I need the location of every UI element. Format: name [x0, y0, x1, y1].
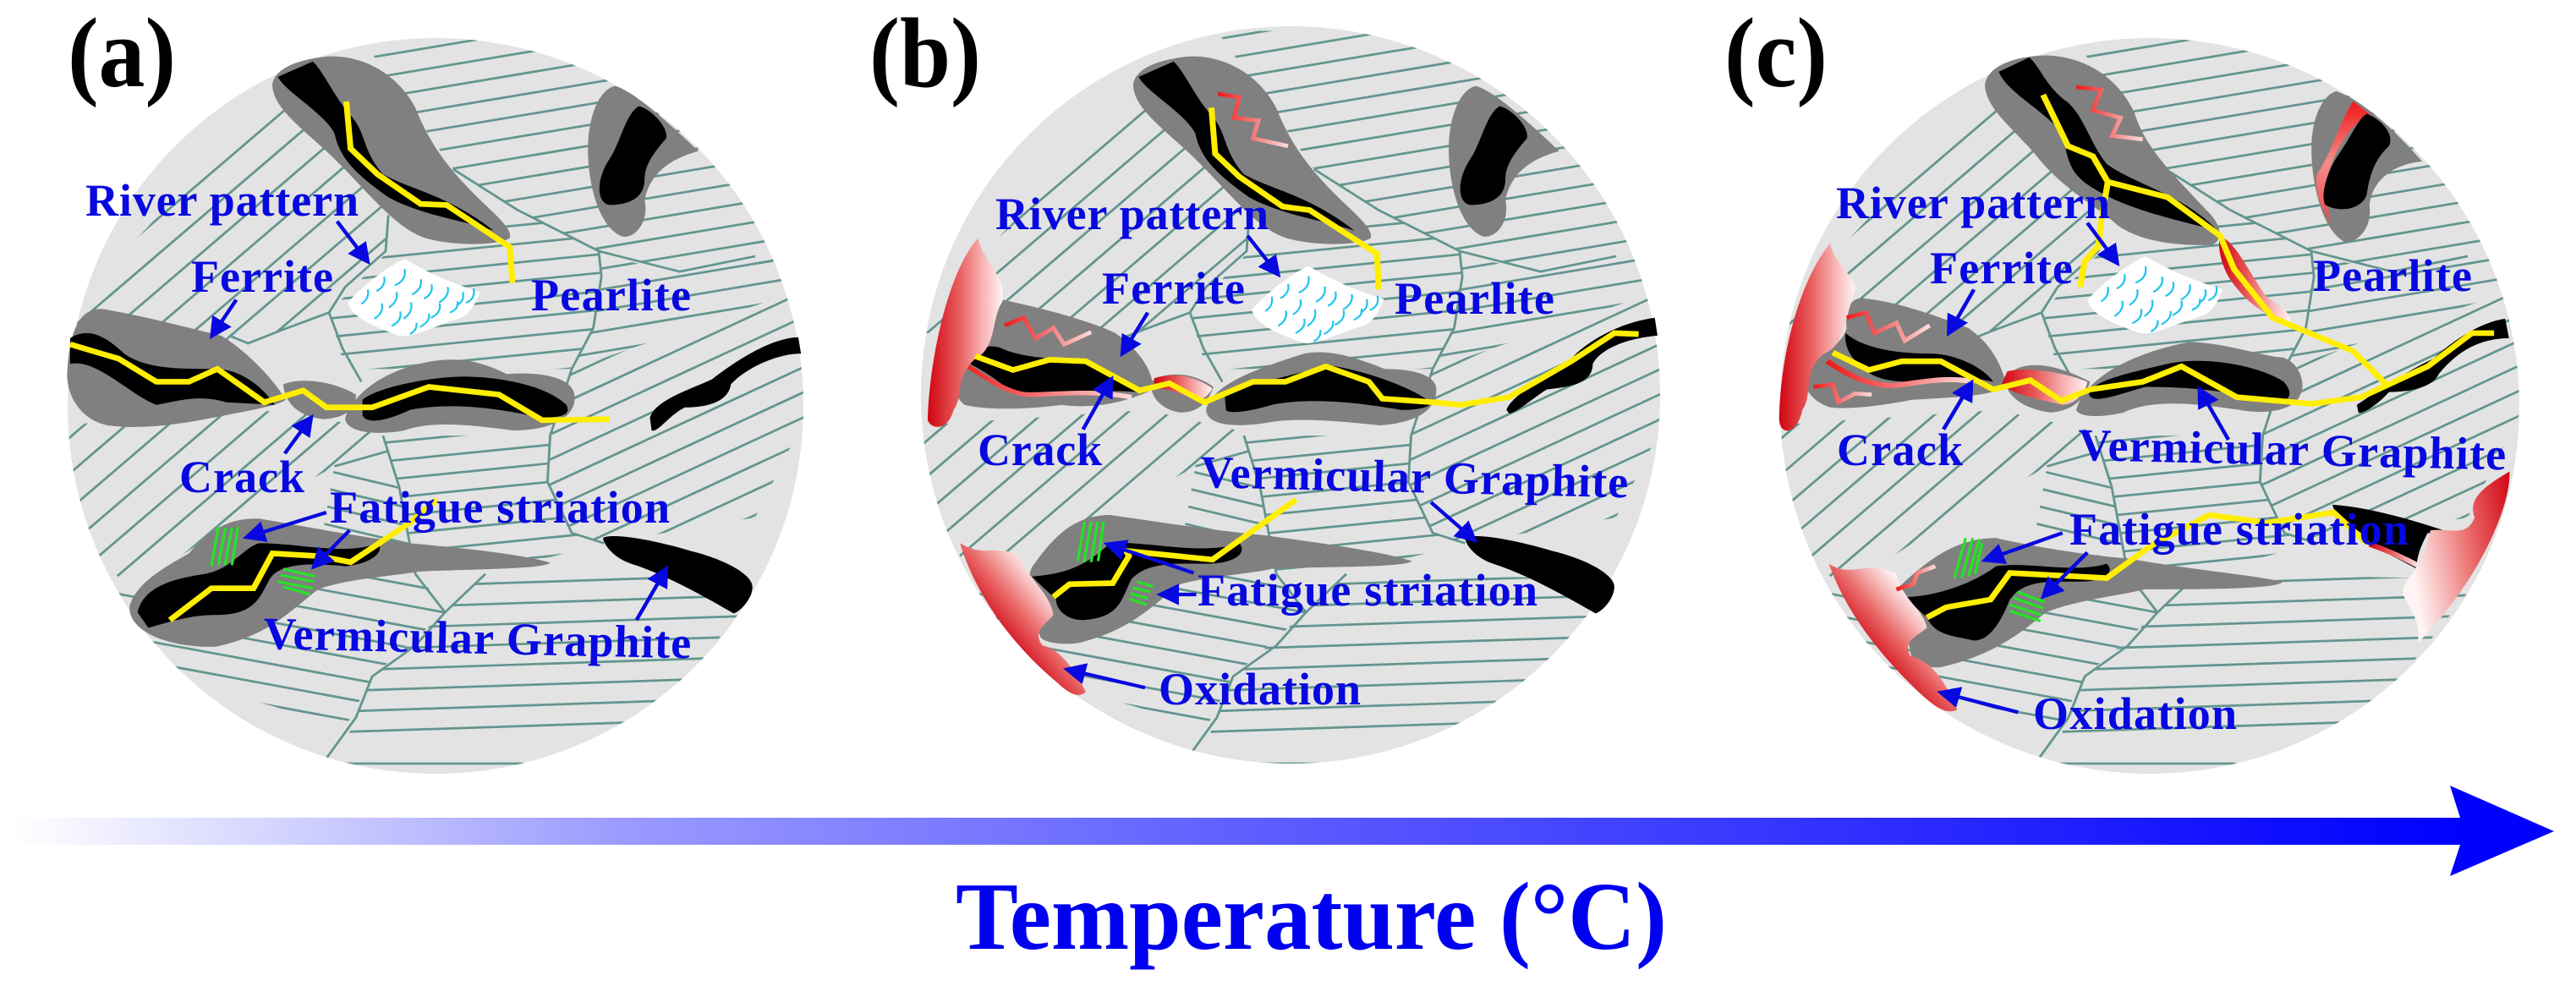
upper right graphite b — [1449, 86, 1559, 237]
arrows a — [211, 222, 668, 620]
microstructure c — [1779, 55, 2509, 712]
disc b — [921, 26, 1660, 764]
labels c — [1836, 178, 2507, 739]
middle left graphite b — [954, 300, 1154, 408]
small graphite a — [283, 381, 356, 419]
labels a: Pearlite — [531, 270, 691, 320]
labels c: Vermicular Graphite — [2078, 419, 2507, 479]
crack paths c — [1833, 95, 2494, 617]
labels a: Fatigue striation — [330, 482, 670, 533]
small graphite b — [1150, 375, 1214, 413]
crack paths a — [70, 101, 610, 620]
labels c: Oxidation — [2033, 688, 2237, 739]
labels b: Vermicular Graphite — [1200, 446, 1629, 507]
middle left graphite a — [67, 309, 286, 427]
oxidation left c — [1779, 244, 1855, 430]
oxidation lower c — [1829, 564, 1957, 711]
middle left graphite c — [1802, 299, 2007, 408]
oxidation right c — [2403, 472, 2509, 644]
lower right graphite b — [1465, 536, 1614, 613]
labels b: Ferrite — [1102, 263, 1245, 314]
labels b: River pattern — [995, 189, 1269, 239]
labels c: Pearlite — [2313, 250, 2472, 301]
top graphite a — [272, 57, 510, 244]
lower graphite c — [1900, 538, 2283, 667]
fatigue striations a — [211, 527, 315, 594]
middle right graphite a — [345, 359, 575, 433]
heading (c): (c) — [1724, 0, 1828, 108]
labels a: Crack — [179, 452, 304, 502]
small graphite c — [2002, 365, 2090, 413]
top graphite c — [1985, 55, 2220, 245]
fatigue striations c — [1954, 538, 2045, 621]
lower right graphite a — [603, 536, 753, 613]
crack paths b — [975, 107, 1639, 597]
panel (c): fracture mechanism at high temperature — [1729, 17, 2519, 774]
labels b — [978, 189, 1629, 715]
grain structure b — [913, 0, 1671, 922]
labels a — [85, 175, 692, 668]
labels b: Crack — [978, 425, 1102, 475]
top graphite core a — [277, 62, 494, 231]
microstructure b — [928, 57, 1658, 695]
temperature gradient arrow — [13, 786, 2554, 876]
river pattern patch b — [1252, 266, 1384, 343]
labels a: River pattern — [85, 175, 359, 226]
oxidised crack zone c — [2219, 236, 2291, 323]
top graphite b — [1133, 57, 1371, 244]
labels a: Vermicular Graphite — [263, 608, 692, 668]
oxidation left b — [928, 238, 1003, 427]
labels a: Ferrite — [191, 251, 333, 302]
thermal cracks c — [1813, 87, 2143, 589]
arrows c — [1938, 223, 2228, 712]
right graphite c — [2357, 319, 2509, 413]
upper right graphite c — [2311, 91, 2422, 242]
labels c: Fatigue striation — [2069, 504, 2409, 555]
disc c — [1780, 38, 2519, 774]
upper right graphite a — [588, 86, 699, 237]
river pattern patch c — [2087, 256, 2222, 333]
fatigue striations b — [1077, 522, 1154, 605]
arrows b — [1064, 236, 1477, 687]
heading (b): (b) — [869, 0, 981, 108]
panel (b): fracture mechanism at medium temperature — [873, 17, 1660, 764]
thermal cracks b — [1005, 94, 1288, 344]
labels c: River pattern — [1836, 178, 2110, 228]
labels c: Crack — [1837, 425, 1963, 475]
lower right graphite c — [2332, 505, 2466, 569]
panel (a): fracture mechanism at low temperature — [67, 17, 803, 774]
right graphite a — [650, 337, 801, 430]
middle right graphite c — [2076, 342, 2303, 416]
axis title: Temperature (°C) — [956, 863, 1667, 970]
microstructure a — [67, 57, 801, 647]
right graphite b — [1506, 318, 1658, 414]
lower graphite b — [1028, 515, 1412, 644]
oxidation lower b — [960, 543, 1086, 695]
disc a — [68, 38, 803, 774]
lower graphite a — [129, 518, 551, 647]
labels b: Oxidation — [1159, 664, 1361, 715]
grain structure a — [52, 0, 810, 922]
heading (a): (a) — [68, 0, 176, 108]
middle right graphite b — [1206, 353, 1436, 425]
labels c: Ferrite — [1930, 243, 2073, 293]
grain structure c — [1781, 39, 2520, 871]
river pattern patch a — [348, 259, 480, 336]
labels b: Pearlite — [1395, 273, 1554, 324]
labels b: Fatigue striation — [1198, 565, 1537, 616]
